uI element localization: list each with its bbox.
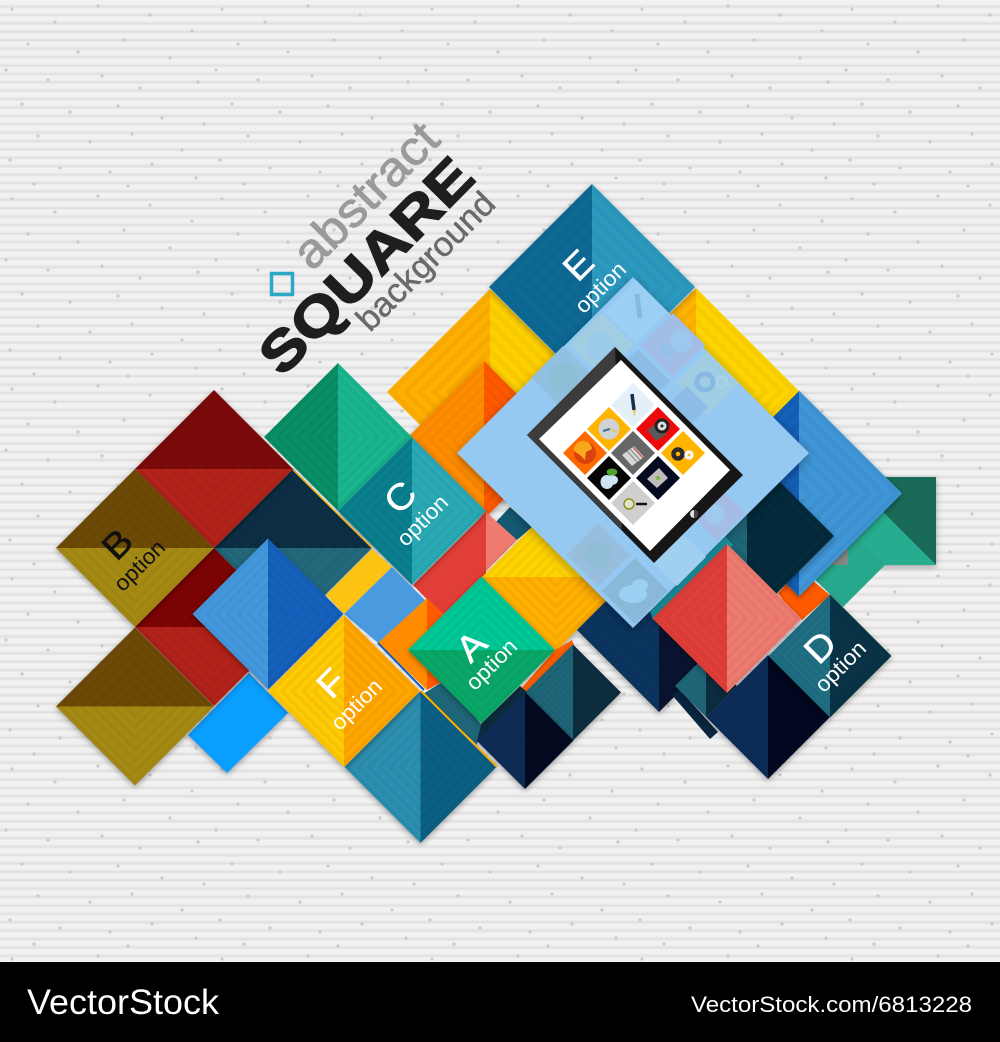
square: back green split diagonally — [848, 477, 936, 565]
diamond: orange behind A — [378, 598, 470, 690]
center red light side — [486, 512, 517, 571]
label: B option: option — [109, 535, 170, 596]
thin orange behind A — [520, 640, 574, 692]
diamond: D panel — [768, 594, 892, 718]
gray fold piece — [830, 548, 848, 565]
tile: chip — [636, 456, 680, 500]
ghost tile: gears — [675, 351, 739, 415]
label: D option: D — [797, 624, 845, 672]
tile: magnifier — [611, 481, 655, 525]
diamond: small teal lower — [675, 655, 737, 717]
diamond: inner orange — [405, 361, 563, 519]
diamond: green — [264, 363, 412, 511]
label: A option: A — [448, 623, 496, 670]
home button — [690, 510, 698, 518]
orange edge line lower — [421, 691, 497, 767]
small teal square outline — [272, 274, 292, 294]
diamond: navy right of A — [577, 548, 741, 712]
diamond: dark teal right — [660, 449, 834, 623]
label: A option — [448, 623, 522, 695]
orange edge line — [293, 470, 372, 548]
label: A option: option — [461, 634, 522, 695]
tile: gears — [661, 431, 705, 475]
diamond: lower green — [800, 522, 885, 607]
diamond: bright blue — [188, 673, 288, 773]
tile: pencil — [611, 383, 655, 427]
diamond: C panel — [338, 437, 486, 585]
tile: clock — [587, 407, 631, 451]
label: C option: C — [377, 474, 425, 522]
light blue panel with reflected icons — [457, 277, 809, 628]
diamond: lower olive — [56, 628, 214, 786]
diamond: bottom yellow — [482, 503, 630, 651]
label: B option — [94, 521, 170, 596]
label: C option — [377, 474, 453, 551]
word: SQUARE: SQUARE — [246, 145, 486, 386]
ghost tile: calendar — [606, 349, 670, 413]
label: C option: option — [392, 490, 453, 551]
diamond: right blue — [696, 390, 902, 596]
diamond: navy bottom — [476, 692, 574, 789]
footer brand: VectorStock — [27, 983, 220, 1022]
small blue strip — [344, 567, 430, 643]
diamond: vertical blue — [192, 538, 344, 690]
label: E option — [555, 242, 631, 318]
diamond: dark teal beside A — [525, 644, 621, 740]
tablet lighter frame side — [527, 347, 622, 530]
ghost tile: cloud — [602, 558, 668, 624]
ghost tile: pencil — [604, 280, 668, 344]
label: E option: option — [570, 257, 631, 318]
word: abstract: abstract — [282, 112, 450, 280]
ghost tile: pie — [531, 346, 595, 410]
word: background: background — [349, 185, 503, 339]
diamond: center red — [413, 512, 486, 615]
blue thin edge along F — [378, 643, 424, 690]
ghost tile: lower pie — [566, 523, 630, 587]
diamond: teal bottom — [344, 691, 496, 843]
label: F option — [309, 661, 387, 735]
diamond: dark navy left — [214, 469, 372, 627]
diamond: A panel — [408, 576, 555, 724]
small dark teal piece — [494, 507, 532, 540]
footer bar — [0, 962, 1000, 1042]
tile: pie chart — [563, 431, 607, 475]
tablet screen — [539, 360, 730, 551]
ghost tile: camera — [641, 313, 705, 377]
label: F option: F — [309, 661, 355, 707]
diamond: B panel — [56, 469, 214, 627]
dark teal behind A — [423, 680, 481, 745]
label: B option: B — [94, 521, 141, 568]
ghost tile: camera lower — [689, 485, 745, 541]
tile: cloud and leaf — [587, 456, 631, 500]
orange piece behind D — [778, 570, 830, 620]
diamond: coral — [652, 544, 802, 693]
diamond: F panel — [268, 615, 420, 767]
diamond: lower navy — [706, 655, 830, 779]
label: E option: E — [555, 242, 602, 289]
footer url: VectorStock.com/6813228 — [691, 992, 972, 1017]
label: F option: option — [326, 674, 387, 735]
tile: calendar — [611, 431, 655, 475]
ghost tile: chip — [666, 386, 708, 428]
diamond: top red — [135, 390, 293, 548]
label: D option: option — [810, 636, 871, 697]
diamond: lower red — [135, 548, 293, 706]
title: abstract SQUARE background — [246, 112, 503, 386]
ghost tile: clock — [570, 313, 634, 377]
diamond: right yellow — [593, 288, 799, 494]
ghost tile: calendar lower — [648, 528, 706, 586]
small yellow strip — [326, 549, 392, 614]
label: D option — [797, 624, 871, 697]
teal sliver above coral — [650, 536, 733, 620]
tile: camera — [636, 407, 680, 451]
dark strip under A — [477, 686, 527, 742]
tablet device — [527, 347, 743, 563]
dark strip under teal — [672, 690, 718, 739]
diamond: E panel — [489, 184, 695, 390]
diamond: left yellow — [387, 289, 593, 495]
